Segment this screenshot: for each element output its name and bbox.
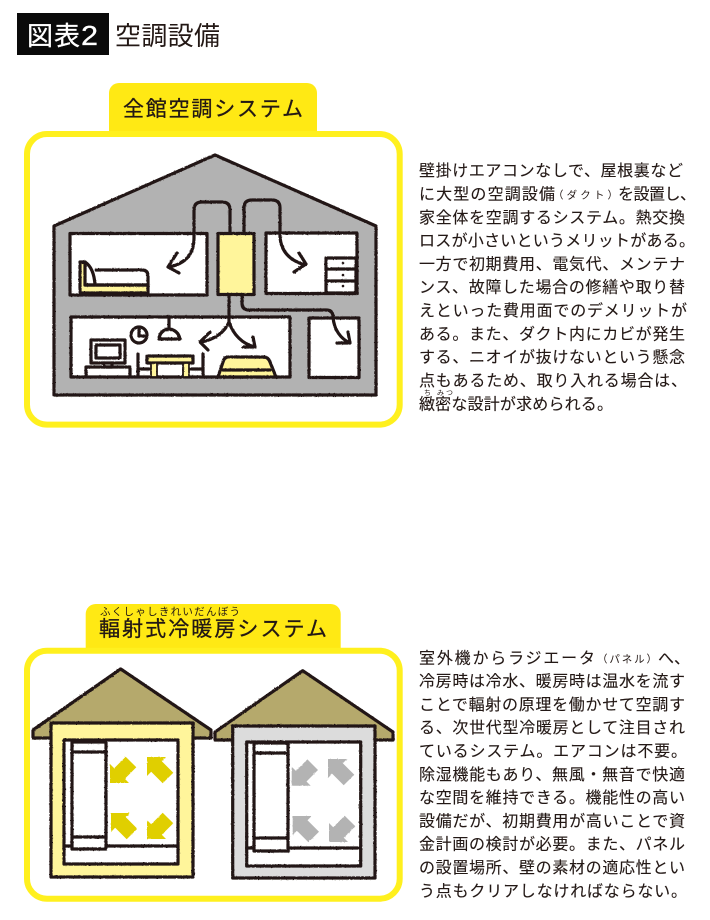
description: central air conditioning: ある。また、ダクト内にカビが発生: [419, 325, 685, 343]
description: central air conditioning: を設置し、: [618, 186, 696, 204]
description: radiant heating and cooling: 除湿機能もあり、無風・無音で快適: [419, 766, 685, 784]
radiator panel: [64, 742, 178, 849]
arrow: upper right: [328, 759, 354, 785]
frame: central air conditioning: [27, 134, 400, 425]
arrow: lower left: [293, 816, 319, 842]
illustration: radiant house, heating: [215, 671, 393, 878]
description: central air conditioning: 家全体を空調するシステム。熱交換: [419, 209, 685, 227]
room: lower left: [71, 317, 290, 377]
description: central air conditioning: ロスが小さいというメリットがある。: [419, 232, 695, 250]
description: radiant heating and cooling: 冷房時は冷水、暖房時は温水を流す: [419, 673, 685, 691]
air conditioning unit: [218, 234, 254, 294]
illustration: radiant house, cooling: [33, 669, 211, 877]
roof: [33, 669, 211, 738]
description: central air conditioning: する、ニオイが抜けないという懸念: [419, 349, 685, 367]
arrow: lower right: [329, 816, 355, 842]
frame: radiant heating and cooling: [27, 651, 400, 899]
tab: central air conditioning heading: 全館空調システム: [123, 98, 303, 121]
arrow: upper left: [110, 757, 136, 783]
description: central air conditioning: ち みつ: [424, 389, 453, 397]
description: central air conditioning: えといった費用面でのデメリットが: [419, 301, 687, 320]
duct: lower right arrow: [242, 295, 350, 343]
clock: [131, 327, 147, 343]
house outline: [54, 155, 376, 395]
tab: central air conditioning heading: [109, 83, 317, 134]
computer and desk: [86, 340, 130, 376]
description: radiant heating and cooling: ているシステム。エアコンは不要。: [419, 742, 687, 760]
description: radiant heating and cooling: [419, 649, 690, 900]
title: figure label: [17, 13, 109, 55]
description: central air conditioning: （ダクト）: [553, 188, 618, 202]
bed: [80, 262, 148, 293]
duct: right supply arrow: [244, 200, 306, 272]
arrow: lower right: [147, 813, 173, 839]
description: central air conditioning: ンス、故障した場合の修繕や取り替: [419, 279, 685, 297]
dining table and chairs: [138, 354, 203, 377]
chest of drawers: [326, 258, 356, 293]
wall: [233, 726, 375, 878]
ceiling lamp: [159, 318, 180, 339]
tab: radiant heating and cooling heading: [86, 604, 341, 650]
panel: radiant heating and cooling: [27, 604, 400, 899]
title: figure label: 2: [81, 20, 98, 51]
arrow: lower left: [111, 813, 137, 839]
room: upper right: [266, 233, 357, 294]
illustration: house cross-section: [54, 155, 376, 395]
description: central air conditioning: 一方で初期費用、電気代、メンテナ: [419, 255, 685, 273]
radiator panel: [247, 743, 361, 851]
arrow: upper right: [147, 757, 173, 783]
description: radiant heating and cooling: 金計画の検討が必要。また、パネル: [419, 836, 685, 854]
description: radiant heating and cooling: 設備だが、初期費用が高いことで資: [419, 812, 685, 830]
description: radiant heating and cooling: う点もクリアしなければならない。: [419, 882, 687, 900]
description: radiant heating and cooling: （パネル）: [597, 653, 657, 665]
description: central air conditioning: 点もあるため、取り入れる場合は、: [419, 372, 687, 390]
title: figure label: 図表: [27, 21, 80, 51]
arrow: upper left: [292, 759, 318, 786]
roof: [215, 671, 393, 740]
wall: [51, 723, 193, 877]
duct: left supply arrow: [168, 202, 230, 273]
room: [247, 742, 361, 866]
description: central air conditioning: に大型の空調設備: [419, 186, 555, 204]
sofa: [218, 357, 276, 377]
description: central air conditioning: 壁掛けエアコンなしで、屋根裏など: [419, 162, 683, 180]
room: lower right: [309, 318, 359, 378]
tab: radiant heating and cooling heading: 輻射式冷暖房システム: [99, 618, 327, 641]
description: radiant heating and cooling: る、次世代型冷暖房として注目され: [419, 719, 685, 737]
description: radiant heating and cooling: ことで輻射の原理を働かせて空調す: [419, 696, 685, 714]
duct: living room arrows: [200, 295, 255, 350]
room: upper left: [70, 234, 207, 295]
description: radiant heating and cooling: へ、: [658, 650, 690, 667]
description: radiant heating and cooling: の設置場所、壁の素材の適応性とい: [419, 859, 685, 877]
room: [64, 740, 178, 864]
tab: radiant heating and cooling heading: ふくしゃしきれいだんぼう: [100, 606, 240, 618]
description: central air conditioning: 緻密な設計が求められる。: [419, 396, 613, 414]
heading: air conditioning equipment: 空調設備: [115, 21, 220, 51]
description: radiant heating and cooling: 室外機からラジエータ: [419, 649, 595, 667]
panel: central air conditioning: [27, 83, 400, 425]
description: radiant heating and cooling: な空間を維持できる。機能性の高い: [419, 789, 685, 807]
description: central air conditioning: [419, 162, 696, 414]
